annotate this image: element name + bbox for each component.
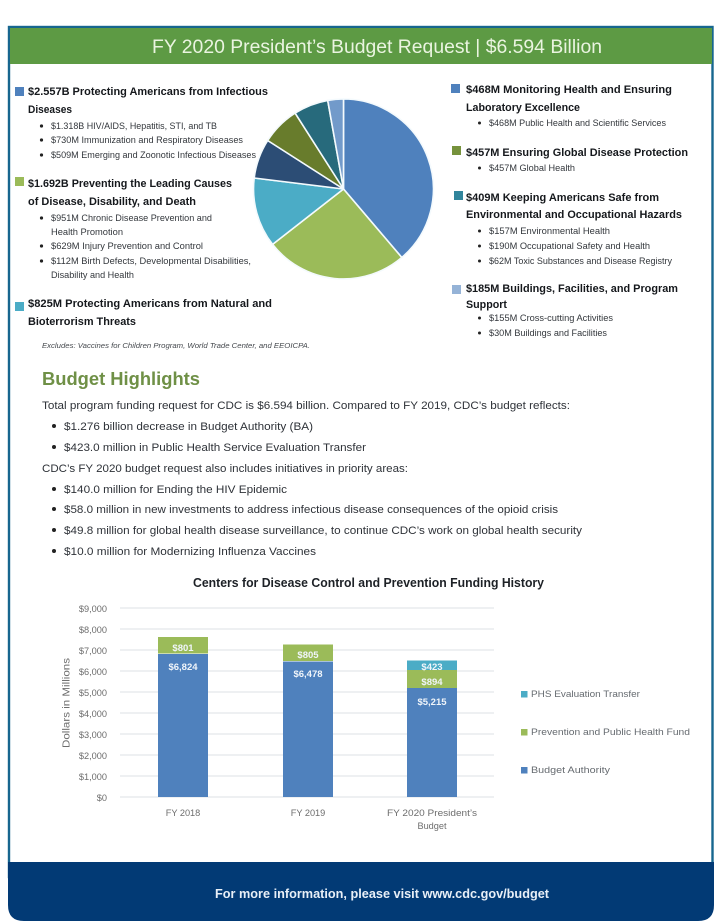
budget highlights text: $58.0 million in new investments to address infectious disease consequences of the opioid crisis — [64, 504, 558, 516]
category: buildings and facilities — [452, 283, 678, 338]
bar: FY 2019: $6,478 — [293, 669, 323, 680]
category: infectious diseases: $2.557B Protecting Americans from Infectious — [28, 86, 268, 98]
category: leading causes: Disability and Health — [51, 270, 134, 280]
y axis labels: $2,000 — [79, 751, 107, 761]
y axis labels: $6,000 — [79, 667, 107, 677]
category: environmental and occupational hazards: $157M Environmental Health — [489, 226, 610, 236]
category: environmental and occupational hazards: $409M Keeping Americans Safe from — [466, 192, 659, 204]
category: environmental and occupational hazards: Environmental and Occupational Hazards — [466, 209, 682, 221]
category: natural and bioterrorism threats: Bioterrorism Threats — [28, 316, 136, 328]
x axis labels: FY 2019 — [291, 808, 325, 818]
bar: FY 2018: $6,824 — [168, 662, 198, 673]
category: monitoring health: $468M Monitoring Health and Ensuring — [466, 84, 672, 96]
category: leading causes: $951M Chronic Disease Prevention and — [51, 213, 212, 223]
footnote: Excludes: Vaccines for Children Program, World Trade Center, and EEOICPA. — [42, 341, 310, 350]
y axis labels: $0 — [97, 793, 107, 803]
bar: FY 2019 — [283, 644, 333, 797]
budget highlights text — [42, 400, 582, 558]
category: leading causes: $1.692B Preventing the Leading Causes — [28, 178, 232, 190]
category: environmental and occupational hazards: $62M Toxic Substances and Disease Registry — [489, 256, 673, 266]
header banner — [10, 28, 712, 64]
bar: FY 2019: $805 — [297, 650, 319, 661]
y axis labels: $5,000 — [79, 688, 107, 698]
budget highlights text: Total program funding request for CDC is $6.594 billion. Compared to FY 2019, CDC’s budget reflects: — [42, 400, 570, 412]
category: monitoring health — [451, 84, 672, 128]
y axis title: Dollars in Millions — [60, 658, 72, 748]
bar: FY 2018: $801 — [172, 643, 194, 654]
bar: FY 2020: $5,215 — [417, 697, 447, 708]
bar: FY 2020 — [407, 660, 457, 797]
x axis labels: Budget — [417, 821, 447, 831]
category: leading causes: $629M Injury Prevention and Control — [51, 241, 203, 251]
panel: left budget categories — [15, 86, 310, 350]
bar: FY 2020: $423 — [421, 662, 443, 673]
x axis labels: FY 2018 — [166, 808, 200, 818]
chart title: Centers for Disease Control and Prevention Funding History — [193, 576, 544, 590]
category: environmental and occupational hazards: $190M Occupational Safety and Health — [489, 241, 650, 251]
budget highlights text: $1.276 billion decrease in Budget Authority (BA) — [64, 421, 313, 433]
category: buildings and facilities: Support — [466, 299, 507, 311]
y axis labels: $4,000 — [79, 709, 107, 719]
budget highlights text: $49.8 million for global health disease surveillance, to continue CDC’s work on global health security — [64, 525, 582, 537]
budget highlights text: $10.0 million for Modernizing Influenza Vaccines — [64, 546, 316, 558]
budget highlights heading: Budget Highlights — [42, 368, 200, 389]
category: global disease protection: $457M Ensuring Global Disease Protection — [466, 147, 688, 159]
category: infectious diseases — [15, 86, 268, 160]
category: leading causes: Health Promotion — [51, 227, 123, 237]
category: buildings and facilities: $155M Cross-cutting Activities — [489, 313, 614, 323]
bar: FY 2018 — [158, 637, 208, 797]
footer band — [8, 862, 714, 921]
category: monitoring health: Laboratory Excellence — [466, 102, 580, 114]
pie chart — [254, 99, 433, 279]
x axis labels: FY 2020 President’s — [387, 808, 477, 818]
category: leading causes — [15, 177, 251, 280]
category: buildings and facilities: $185M Buildings, Facilities, and Program — [466, 283, 678, 295]
category: environmental and occupational hazards — [454, 191, 682, 266]
footer band: For more information, please visit www.cdc.gov/budget — [215, 886, 550, 901]
category: buildings and facilities: $30M Buildings and Facilities — [489, 328, 608, 338]
y axis labels: $1,000 — [79, 772, 107, 782]
x axis labels — [166, 808, 477, 831]
chart legend — [521, 689, 690, 775]
bar: FY 2020: $894 — [421, 677, 443, 688]
category: leading causes: $112M Birth Defects, Developmental Disabilities, — [51, 256, 251, 266]
header banner: FY 2020 President’s Budget Request | $6.594 Billion — [152, 36, 602, 58]
category: natural and bioterrorism threats: $825M Protecting Americans from Natural and — [28, 298, 272, 310]
bar chart: funding history — [60, 604, 494, 831]
chart legend: PHS Evaluation Transfer — [531, 689, 640, 699]
budget highlights text: CDC’s FY 2020 budget request also includes initiatives in priority areas: — [42, 463, 408, 475]
chart legend: Prevention and Public Health Fund — [531, 727, 690, 737]
chart legend: Budget Authority — [531, 765, 610, 775]
y axis labels: $3,000 — [79, 730, 107, 740]
y axis labels: $9,000 — [79, 604, 107, 614]
y axis labels — [79, 604, 107, 803]
category: global disease protection — [452, 146, 688, 173]
budget highlights text: $140.0 million for Ending the HIV Epidemic — [64, 484, 287, 496]
category: monitoring health: $468M Public Health and Scientific Services — [489, 118, 667, 128]
y axis labels: $8,000 — [79, 625, 107, 635]
category: infectious diseases: $1.318B HIV/AIDS, Hepatitis, STI, and TB — [51, 121, 217, 131]
category: global disease protection: $457M Global Health — [489, 163, 575, 173]
category: infectious diseases: $730M Immunization and Respiratory Diseases — [51, 135, 244, 145]
category: infectious diseases: Diseases — [28, 104, 72, 116]
panel: right budget categories — [451, 84, 688, 338]
category: natural and bioterrorism threats — [15, 298, 272, 328]
budget highlights text: $423.0 million in Public Health Service Evaluation Transfer — [64, 442, 366, 454]
y axis labels: $7,000 — [79, 646, 107, 656]
category: leading causes: of Disease, Disability, and Death — [28, 196, 196, 208]
category: infectious diseases: $509M Emerging and Zoonotic Infectious Diseases — [51, 150, 257, 160]
